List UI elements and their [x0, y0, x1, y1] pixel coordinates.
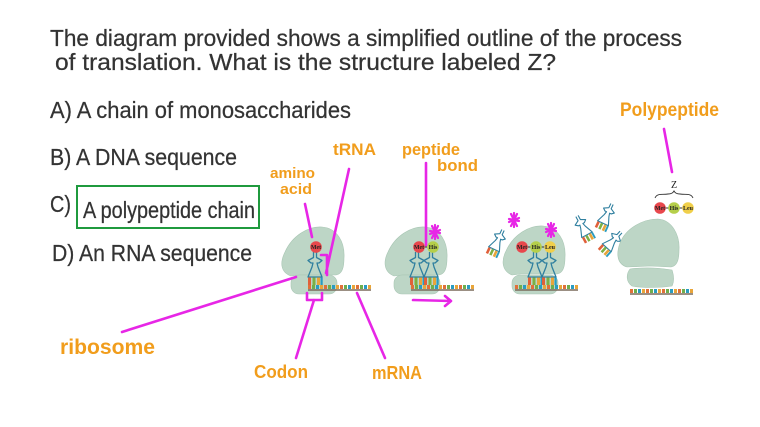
ribosome stage 2: Met — [414, 245, 424, 251]
label: polypeptide: Polypeptide — [620, 100, 719, 121]
option A: A) A chain of monosaccharides — [50, 97, 351, 123]
polypeptide chain Z: His — [670, 206, 679, 212]
option B: B) A DNA sequence — [50, 144, 237, 170]
arrow: ribosome movement — [413, 296, 451, 306]
question text: of translation. What is the structure labeled Z? — [55, 49, 556, 75]
ribosome stage 1: Met — [311, 245, 321, 251]
label: amino acid: acid — [280, 181, 312, 198]
pointer: polypeptide — [664, 129, 672, 172]
label: amino acid: amino — [270, 165, 315, 182]
pointer: ribosome — [122, 277, 296, 332]
ribosome stage 3: Leu — [545, 245, 556, 251]
pointer: peptide bond — [425, 163, 427, 245]
ribosome stage 2 — [385, 227, 474, 294]
ribosome stage 4 — [618, 219, 693, 294]
label: ribosome: ribosome — [60, 336, 155, 359]
pointer: mRNA — [357, 293, 385, 358]
ribosome stage 1 — [282, 227, 371, 294]
label: codon: Codon — [254, 362, 308, 382]
option D: D) An RNA sequence — [52, 240, 252, 266]
ribosome stage 3: His — [532, 245, 541, 251]
option C — [50, 186, 259, 228]
polypeptide chain Z — [654, 180, 694, 214]
label: amino acid — [270, 165, 315, 198]
question text: The diagram provided shows a simplified outline of the process — [50, 25, 682, 51]
polypeptide chain Z: Z — [671, 180, 677, 191]
label: mRNA: mRNA — [372, 363, 422, 383]
label: peptide bond: bond — [437, 156, 478, 175]
ribosome stage 3 — [503, 226, 578, 294]
pointer: amino acid — [305, 204, 312, 237]
option C: C) — [50, 191, 71, 217]
polypeptide chain Z: Leu — [683, 206, 694, 212]
ribosome stage 2: His — [429, 245, 438, 251]
label: tRNA: tRNA — [333, 140, 376, 159]
option C: A polypeptide chain — [83, 197, 255, 223]
label: peptide bond: peptide — [402, 140, 460, 159]
pointer: codon bracket — [296, 293, 322, 358]
pointer: tRNA — [321, 169, 349, 275]
marks: asterisks — [430, 213, 556, 239]
released tRNAs, stage 4 — [572, 201, 626, 257]
label: peptide bond — [402, 140, 478, 175]
question text — [50, 25, 682, 75]
polypeptide chain Z: Met — [655, 206, 665, 212]
released tRNA, stage 3 — [486, 227, 509, 258]
ribosome stage 3: Met — [517, 245, 527, 251]
